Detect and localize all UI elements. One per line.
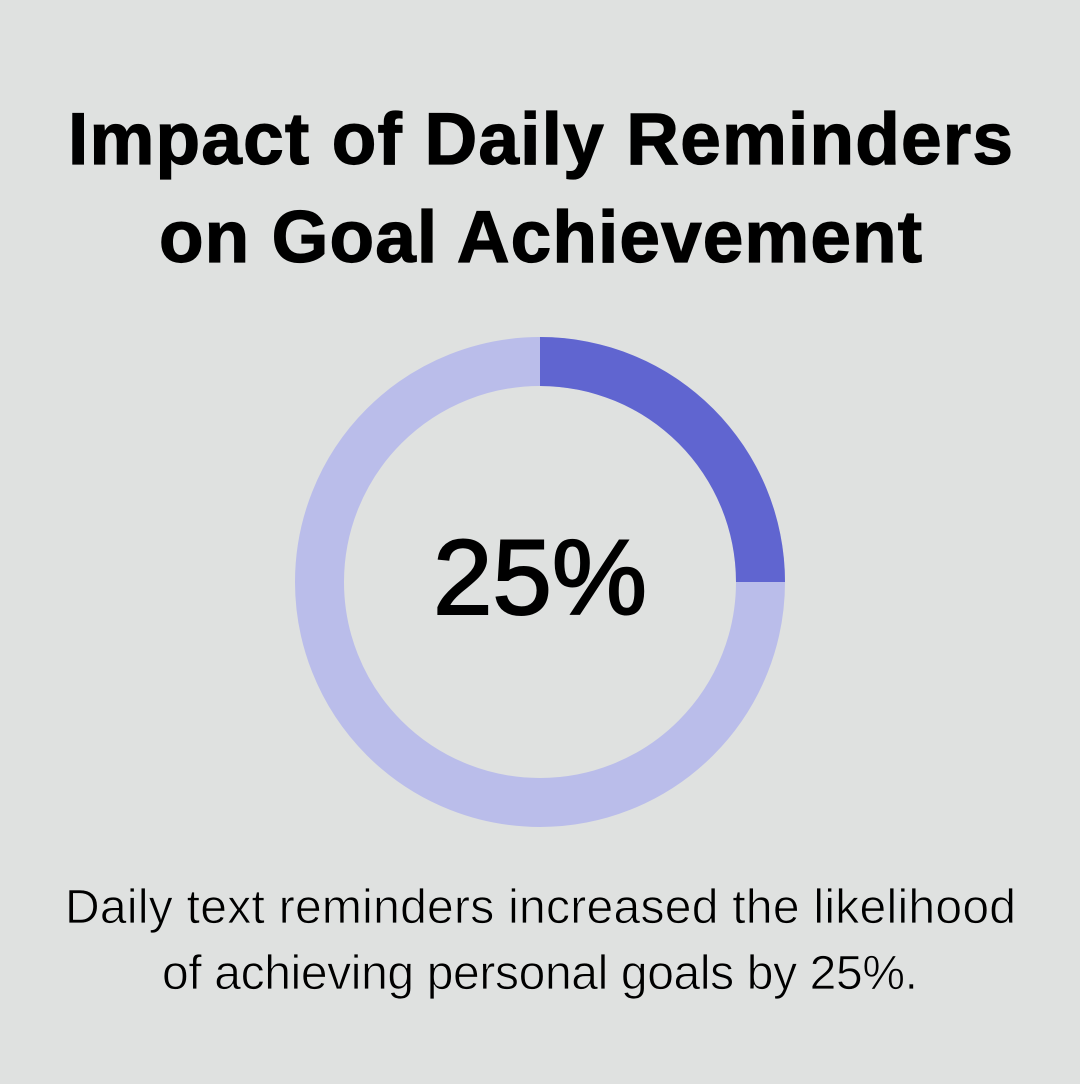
title xyxy=(68,99,1013,278)
donut track xyxy=(320,362,760,802)
title: Impact of Daily Reminders xyxy=(68,99,1013,180)
description text: of achieving personal goals by 25%. xyxy=(162,947,918,1000)
donut value segment 25% xyxy=(540,337,785,582)
title: on Goal Achievement xyxy=(159,197,922,278)
description text xyxy=(65,881,1016,1000)
center value: 25% xyxy=(433,517,647,637)
description text: Daily text reminders increased the likelihood xyxy=(65,881,1016,934)
donut chart xyxy=(320,337,785,802)
